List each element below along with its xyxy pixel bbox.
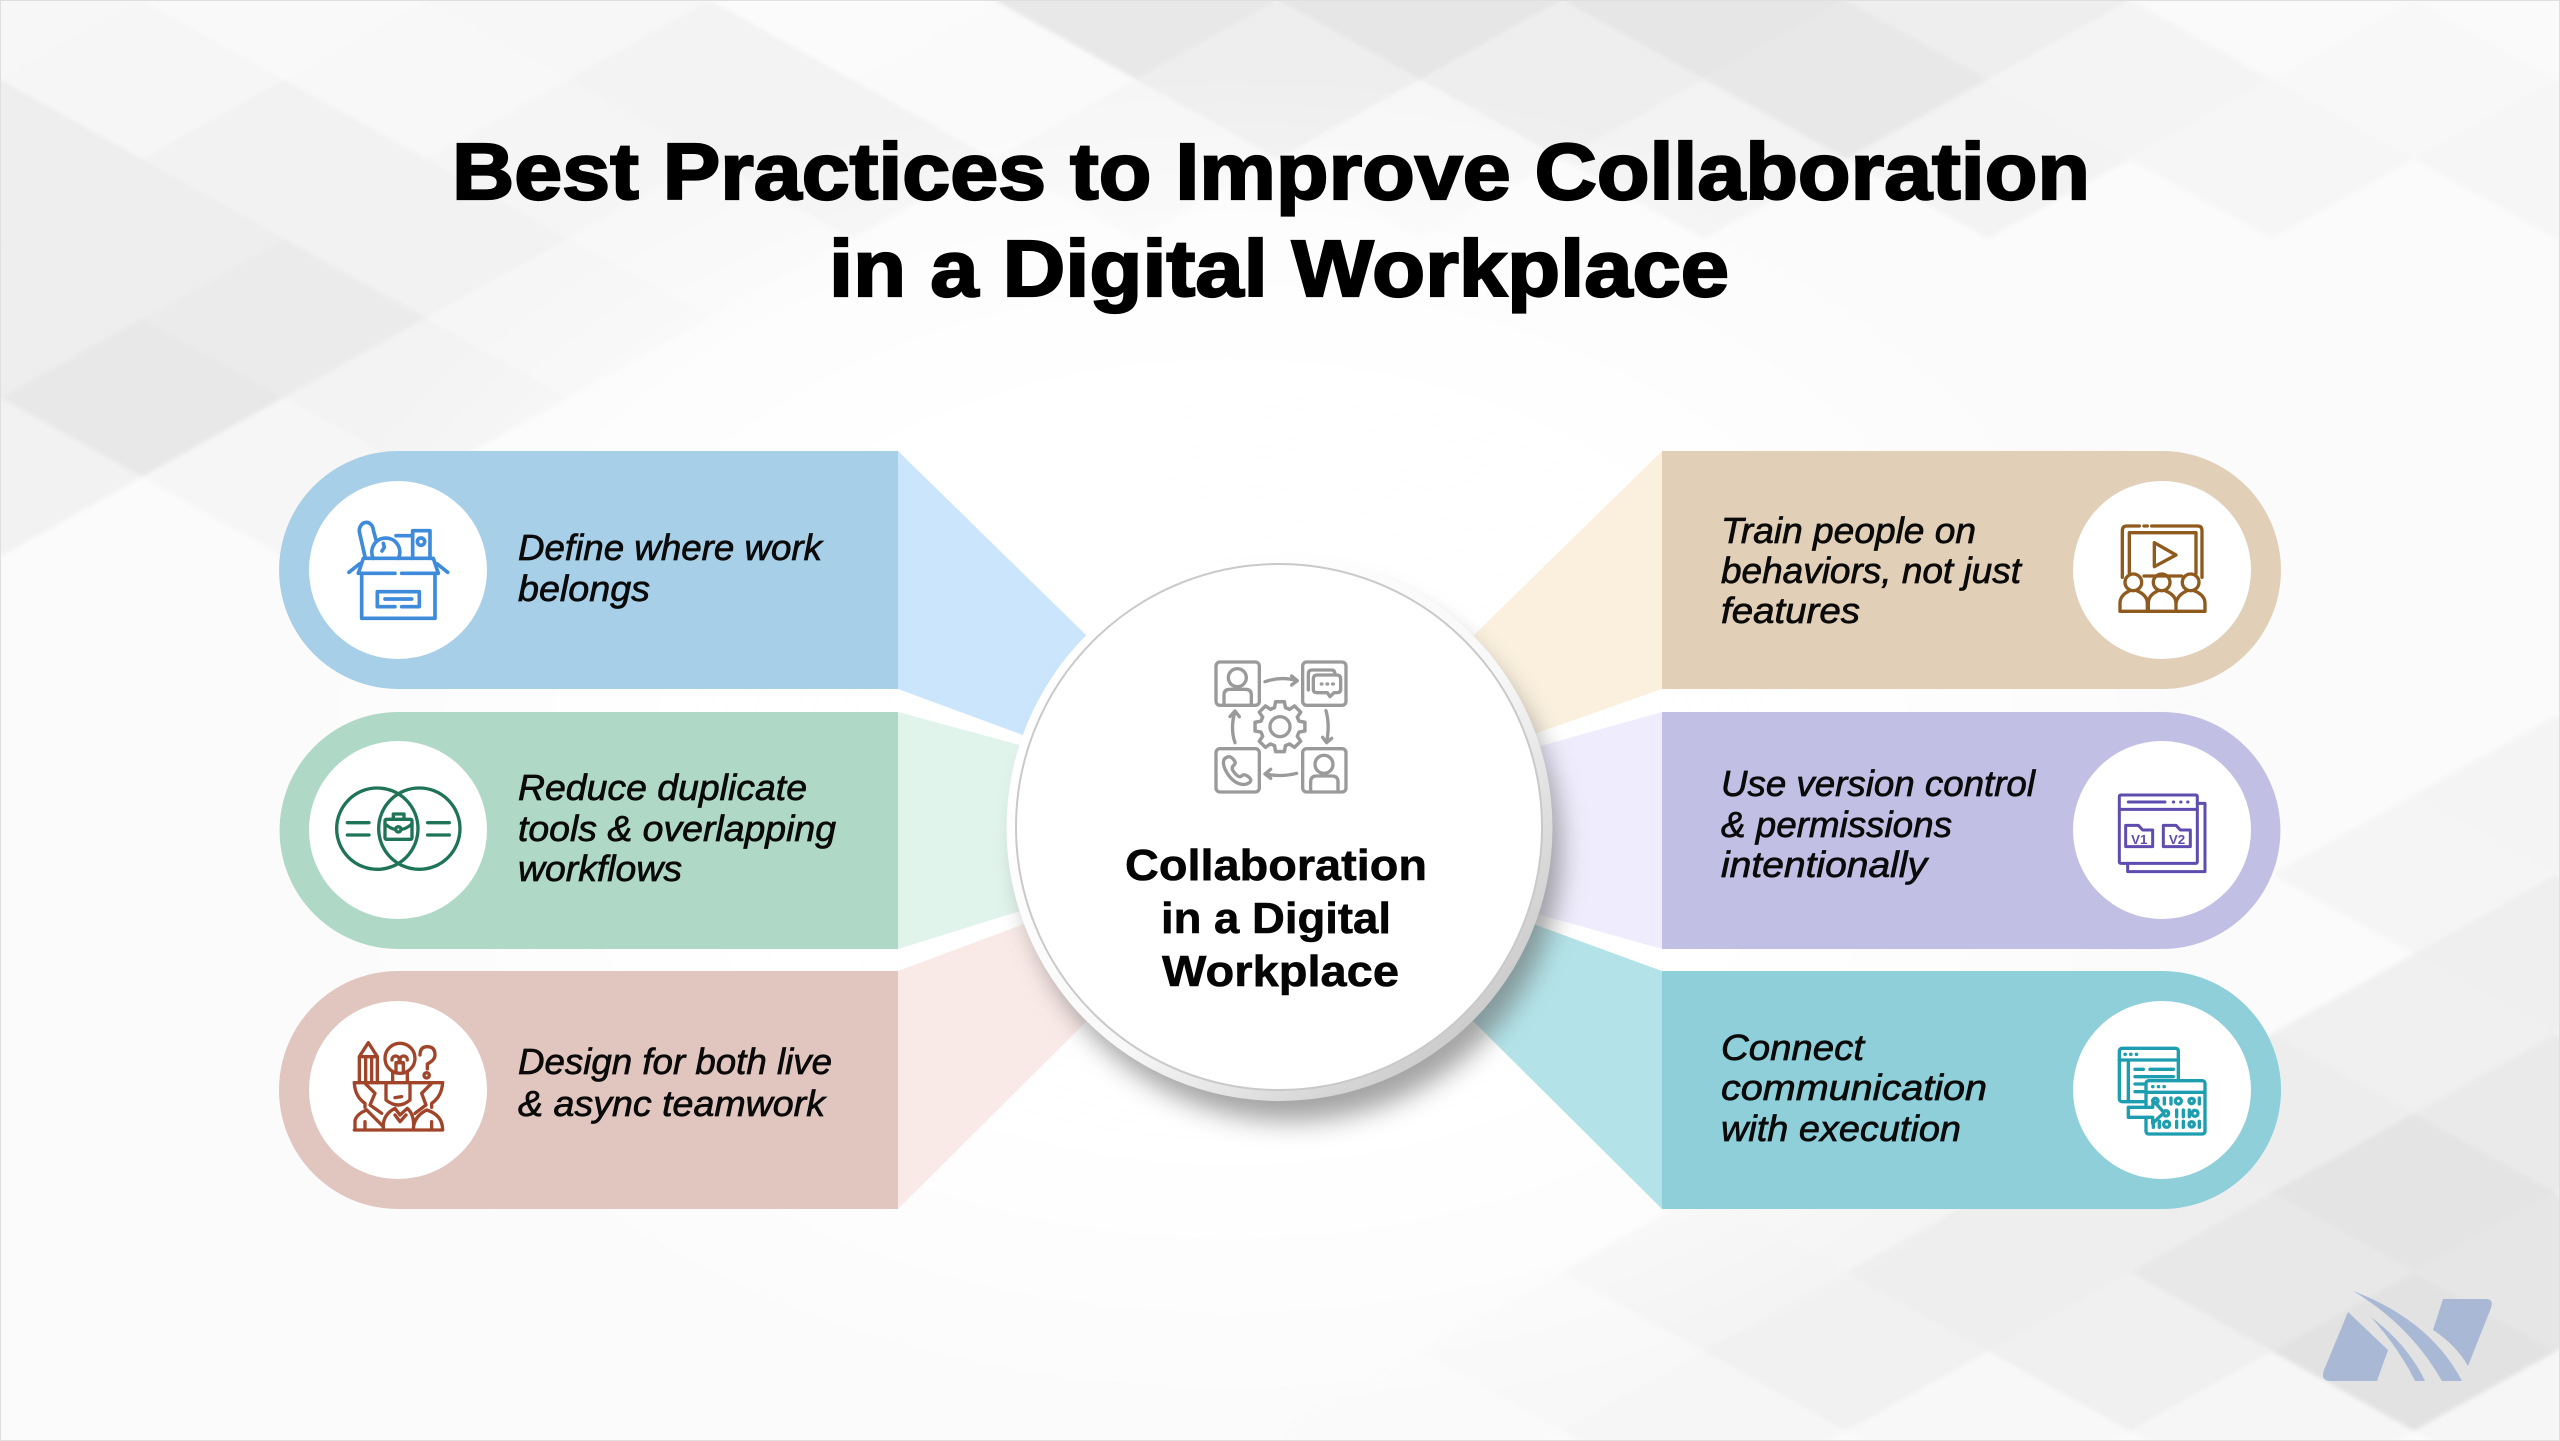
text: train people on behaviors (1721, 510, 2023, 631)
icon: team with ideas (354, 1043, 443, 1130)
text: define where work belongs (518, 527, 824, 609)
text: design for live and async: & async teamwork (518, 1083, 827, 1124)
icon: code windows with arrow (2119, 1048, 2205, 1134)
panel: reduce duplicate tools (280, 712, 1150, 949)
text: design for live and async: Design for both live (518, 1041, 832, 1082)
text: train people on behaviors: features (1721, 590, 1860, 631)
text: hub heading: in a Digital (1161, 894, 1391, 943)
text: version control and permissions (1721, 763, 2036, 885)
icon: video training audience (2120, 526, 2205, 611)
icon: collaboration cycle (1216, 662, 1346, 792)
text: hub heading: Collaboration (1125, 841, 1427, 890)
text: reduce duplicate tools: Reduce duplicate (518, 767, 807, 808)
title (452, 127, 2090, 313)
text: reduce duplicate tools: tools & overlapping (518, 808, 836, 849)
panel: define where work belongs (279, 451, 1200, 781)
icon: versioned folders window: V2 (2169, 832, 2185, 847)
panel: connect communication with execution (1360, 879, 2281, 1209)
icon: versioned folders window: V1 (2131, 832, 2148, 847)
text: hub heading: Workplace (1162, 947, 1399, 996)
title: Best Practices to Improve Collaboration (452, 127, 2090, 216)
text: define where work belongs: Define where work (518, 527, 824, 568)
text: connect communication with execution: with execution (1721, 1108, 1961, 1149)
icon: overlapping circles with briefcase (337, 788, 460, 869)
logo mark (2323, 1291, 2492, 1381)
icon: storage box (349, 522, 448, 618)
title: in a Digital Workplace (829, 224, 1729, 313)
central hub circle (1006, 555, 1561, 1121)
text: version control and permissions: & permissions (1721, 804, 1952, 845)
text: connect communication with execution (1721, 1027, 1987, 1149)
text: version control and permissions: intentionally (1721, 844, 1929, 885)
text: hub heading (1125, 841, 1427, 996)
panel: design for live and async (279, 877, 1200, 1209)
text: reduce duplicate tools (518, 767, 836, 889)
text: train people on behaviors: behaviors, not just (1721, 550, 2023, 591)
text: version control and permissions: Use version control (1721, 763, 2036, 804)
panel: version control and permissions (1410, 712, 2280, 949)
icon: versioned folders window (2119, 795, 2205, 872)
text: design for live and async (518, 1041, 832, 1124)
text: connect communication with execution: communication (1721, 1067, 1987, 1108)
text: connect communication with execution: Connect (1721, 1027, 1866, 1068)
text: train people on behaviors: Train people on (1721, 510, 1976, 551)
text: reduce duplicate tools: workflows (518, 848, 682, 889)
text: define where work belongs: belongs (518, 568, 650, 609)
panel: train people on behaviors (1360, 451, 2281, 778)
